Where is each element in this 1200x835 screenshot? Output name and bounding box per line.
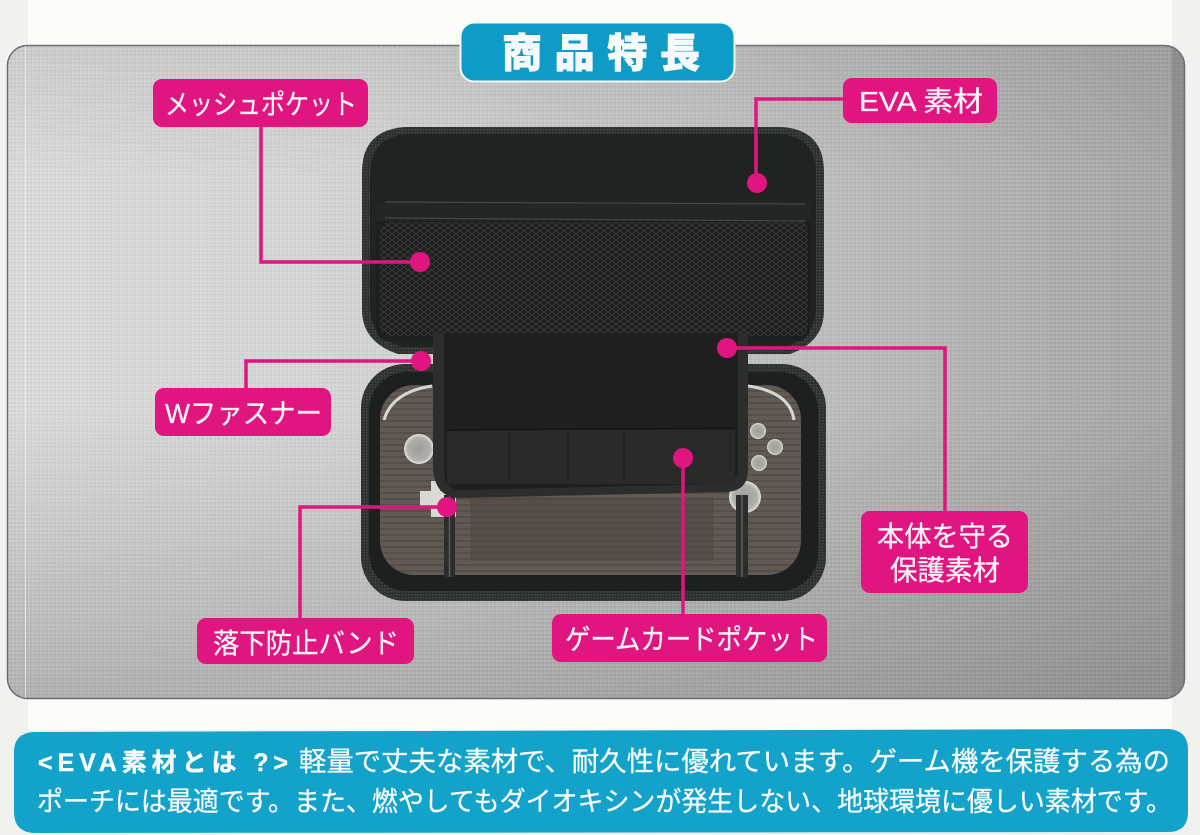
console <box>380 385 801 575</box>
product photo: open case <box>361 127 826 601</box>
label: protective material <box>861 511 1028 593</box>
game card flap <box>433 333 748 498</box>
note line 1: 軽量で丈夫な素材で、耐久性に優れています。ゲーム機を保護する為の <box>299 747 1170 777</box>
connector: game card pocket <box>673 448 693 614</box>
title badge <box>460 22 734 82</box>
label: mesh pocket <box>153 79 368 127</box>
label: mesh pocket: メッシュポケット <box>165 89 357 120</box>
connector: mesh pocket <box>261 127 430 272</box>
label: EVA material: EVA 素材 <box>859 86 983 117</box>
upper half of case <box>362 127 824 354</box>
mesh pocket <box>376 202 810 341</box>
connector: protective material <box>717 338 945 511</box>
label: W zipper: Wファスナー <box>165 398 322 429</box>
label: fall prevention band: 落下防止バンド <box>213 628 399 659</box>
note band: about EVA material <box>14 729 1188 833</box>
connector: EVA material <box>747 99 843 193</box>
panel: product features <box>8 46 1184 698</box>
label: W zipper <box>155 388 331 436</box>
label: game card pocket: ゲームカードポケット <box>565 624 818 655</box>
label: protective material: 保護素材 <box>890 555 1000 586</box>
note heading: <EVA素材とは ?> <box>38 749 288 777</box>
label: EVA material <box>843 78 997 123</box>
elastic bands <box>444 495 748 577</box>
title badge: 商品特長 <box>502 32 700 76</box>
label: fall prevention band <box>197 618 414 664</box>
connector: fall prevention band <box>300 497 457 618</box>
note line 2: ポーチには最適です。また、燃やしてもダイオキシンが発生しない、地球環境に優しい素材です。 <box>37 787 1172 817</box>
label: protective material: 本体を守る <box>877 521 1013 552</box>
lower half of case <box>361 364 826 601</box>
label: game card pocket <box>552 614 827 662</box>
connector: W zipper <box>246 351 431 388</box>
